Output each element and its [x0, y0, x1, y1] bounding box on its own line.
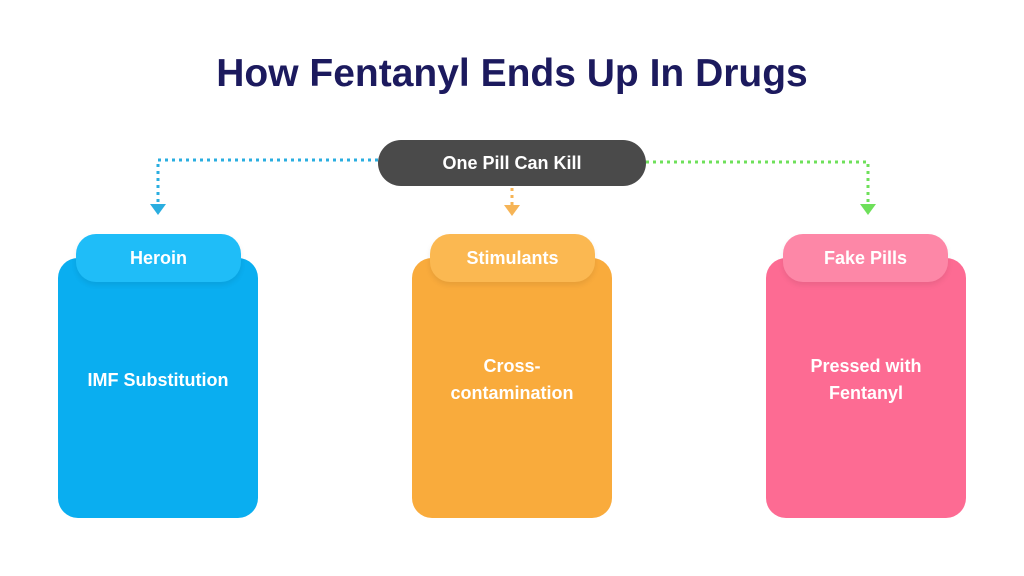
arrow: to fake pills [646, 162, 876, 215]
tab: fake pills: Fake Pills [824, 248, 907, 268]
panel: stimulants [412, 258, 612, 518]
central pill: One Pill Can Kill [442, 152, 582, 172]
tab: heroin [76, 234, 241, 282]
central pill [378, 140, 646, 186]
title: How Fentanyl Ends Up In Drugs [216, 52, 808, 95]
panel: heroin: IMF Substitution [88, 370, 228, 390]
arrow: to heroin [150, 160, 378, 215]
tab: fake pills [783, 234, 948, 282]
panel: fake pills: Fentanyl [829, 383, 903, 403]
tab: heroin: Heroin [130, 248, 187, 268]
panel: stimulants: Cross- [483, 356, 540, 376]
panel: stimulants: contamination [450, 383, 574, 403]
tab: stimulants [430, 234, 595, 282]
panel: heroin [58, 258, 258, 518]
panel: fake pills: Pressed with [810, 356, 922, 376]
tab: stimulants: Stimulants [466, 248, 558, 268]
panel: fake pills [766, 258, 966, 518]
arrow: to stimulants [504, 188, 520, 216]
